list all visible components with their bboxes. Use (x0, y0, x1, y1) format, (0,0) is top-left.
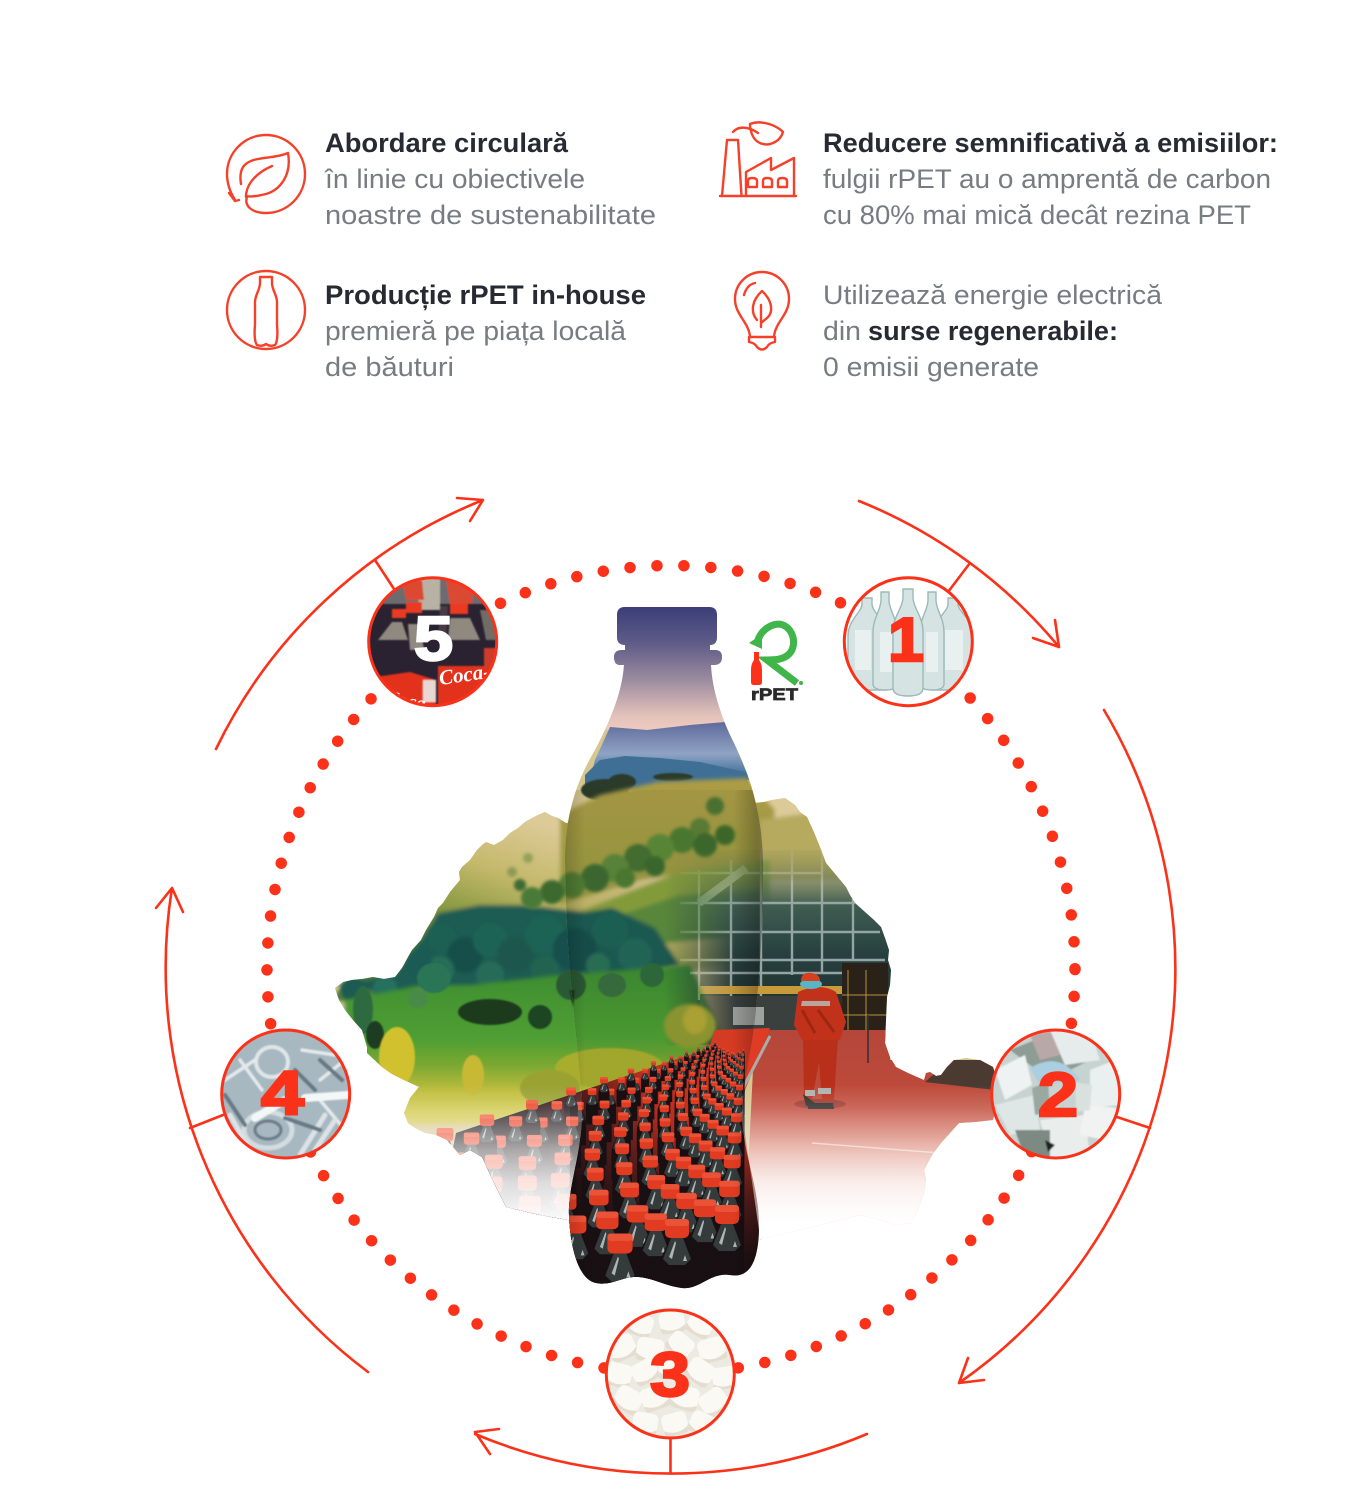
text: circular approach: Abordare circulară (325, 128, 569, 158)
step 5: finished Coca-Cola bottles (367, 576, 498, 708)
step 2: PET flakes: 2 (1038, 1061, 1078, 1130)
text: circular approach: noastre de sustenabilitate (325, 200, 656, 230)
map of Romania photo collage (335, 798, 994, 1240)
arrow: step 1 to 2 (859, 501, 1059, 647)
text: renewable energy (823, 280, 1163, 382)
rPET logo (749, 624, 803, 704)
text: in-house rPET: Producție rPET in-house (325, 280, 646, 310)
text: renewable energy: din (823, 316, 861, 346)
text: renewable energy: 0 emisii generate (823, 352, 1039, 382)
step 3: PET pellets (602, 1309, 739, 1439)
arrow: step 4 to 5 (156, 888, 368, 1372)
text: in-house rPET (325, 280, 646, 382)
step 2: PET flakes (992, 1030, 1120, 1158)
connector ticks (190, 560, 1150, 1473)
step 4: PET preforms: 4 (261, 1059, 305, 1128)
text: circular approach: în linie cu obiectivele (324, 164, 585, 194)
step 1: PET bottles (844, 578, 974, 706)
text: reduced emissions (823, 128, 1278, 230)
step 5: finished Coca-Cola bottles: Coca (384, 687, 428, 715)
benefit: renewable energy (735, 272, 1163, 382)
arrow: step 5 to 1 (216, 498, 483, 749)
step 5: finished Coca-Cola bottles: 5 (414, 605, 453, 674)
arrow: step 2 to 3 (959, 710, 1175, 1383)
text: reduced emissions: fulgii rPET au o amprentă de carbon (823, 164, 1271, 194)
outer cycle arrows (156, 498, 1175, 1474)
benefit: circular approach (227, 128, 656, 230)
text: in-house rPET: premieră pe piața locală (325, 316, 627, 346)
icon: factory with leaf (720, 122, 796, 196)
benefit: reduced emissions (720, 122, 1278, 230)
bottle photo collage (565, 607, 763, 1288)
rPET logo: rPET (751, 685, 799, 704)
step 1: PET bottles: 1 (888, 606, 924, 675)
dotted ring (267, 566, 1075, 1374)
step 5: finished Coca-Cola bottles: Coca-Cola (437, 653, 532, 690)
step 4: PET preforms (222, 1030, 350, 1158)
icon: light bulb with leaf (735, 272, 789, 350)
icon: bottle in circle (227, 271, 305, 349)
step 3: PET pellets: 3 (650, 1341, 690, 1410)
text: renewable energy: Utilizează energie electrică (823, 280, 1163, 310)
text: reduced emissions: Reducere semnificativă a emisiilor: (823, 128, 1278, 158)
text: in-house rPET: de băuturi (325, 352, 454, 382)
text: renewable energy: surse regenerabile: (868, 316, 1118, 346)
text: reduced emissions: cu 80% mai mică decât rezina PET (823, 200, 1251, 230)
text: circular approach (324, 128, 656, 230)
arrow: step 3 to 4 (475, 1429, 867, 1474)
icon: leaf with circular arrow (227, 135, 305, 213)
benefit: in-house rPET (227, 271, 646, 382)
